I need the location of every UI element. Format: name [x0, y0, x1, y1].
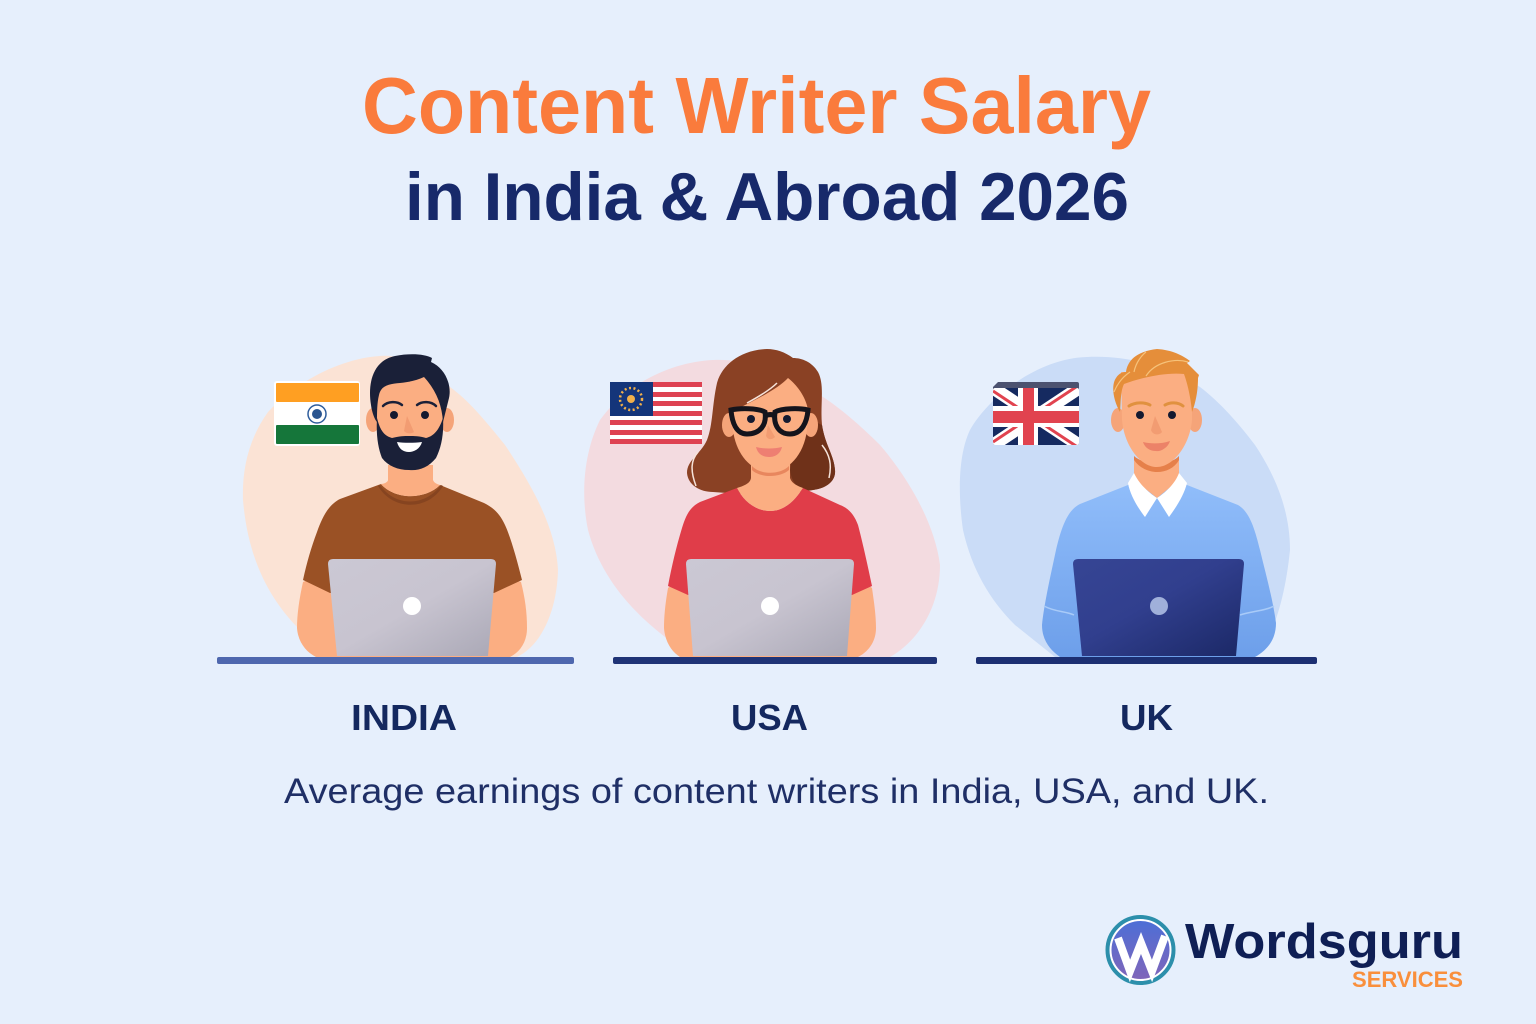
face — [733, 378, 808, 472]
desk — [217, 657, 574, 664]
chin shadow — [752, 466, 789, 476]
mouth — [756, 447, 782, 457]
ears — [366, 408, 380, 432]
panel: India — [217, 354, 574, 738]
background blob — [960, 357, 1290, 657]
sleeve cuffs — [1044, 606, 1274, 615]
glasses — [731, 409, 808, 434]
t-shirt — [668, 488, 872, 595]
arms — [297, 570, 527, 657]
logo: Wordsguru Services — [1108, 915, 1463, 992]
eyes and brows — [1129, 403, 1183, 419]
background blob — [243, 356, 558, 657]
arms — [664, 570, 876, 657]
shirt collar — [1128, 473, 1187, 517]
face — [1121, 372, 1192, 467]
panel: USA — [584, 349, 940, 738]
desk — [613, 657, 937, 664]
mouth — [1143, 441, 1170, 451]
ears — [722, 413, 736, 437]
hair highlights — [1114, 352, 1188, 392]
infographic canvas — [217, 75, 1462, 987]
t-shirt — [303, 484, 522, 593]
caption: Average earnings of content writers in India, USA, and UK. — [284, 772, 1269, 811]
flag: India — [274, 381, 360, 446]
flag: USA — [610, 382, 702, 444]
neck — [1134, 460, 1179, 498]
hair highlights — [692, 383, 830, 486]
neck — [381, 465, 440, 496]
background blob — [584, 360, 940, 657]
label: USA: USA — [731, 697, 808, 738]
collar — [378, 485, 443, 505]
desk — [976, 657, 1317, 664]
hair back — [687, 349, 835, 494]
laptop — [686, 559, 854, 656]
ears — [1111, 408, 1125, 432]
nose — [1151, 416, 1162, 434]
eyes — [747, 415, 791, 423]
beard — [377, 418, 443, 470]
hair — [1113, 349, 1199, 412]
neck — [737, 455, 803, 511]
person — [664, 349, 876, 657]
person — [297, 354, 527, 657]
title — [362, 61, 1151, 235]
title line 1: Content Writer Salary — [362, 61, 1151, 150]
label: India: INDIA — [351, 697, 457, 738]
laptop — [328, 559, 496, 656]
label: UK: UK — [1120, 697, 1173, 738]
panel: UK — [960, 349, 1317, 738]
face — [377, 372, 443, 470]
smile — [397, 442, 422, 452]
wordmark: Wordsguru — [1185, 915, 1463, 969]
hair — [370, 354, 450, 422]
flag: UK — [993, 382, 1079, 448]
nose — [404, 416, 414, 433]
laptop — [1073, 559, 1244, 656]
nose — [766, 425, 775, 439]
person — [1042, 349, 1276, 657]
logo mark — [1108, 917, 1174, 983]
chin shadow — [1134, 456, 1179, 472]
hair shadow — [790, 415, 835, 490]
sweater — [1042, 485, 1276, 657]
eyes and brows — [383, 402, 436, 419]
title line 2: in India & Abroad 2026 — [405, 159, 1129, 235]
services: SERVICES — [1352, 967, 1463, 992]
